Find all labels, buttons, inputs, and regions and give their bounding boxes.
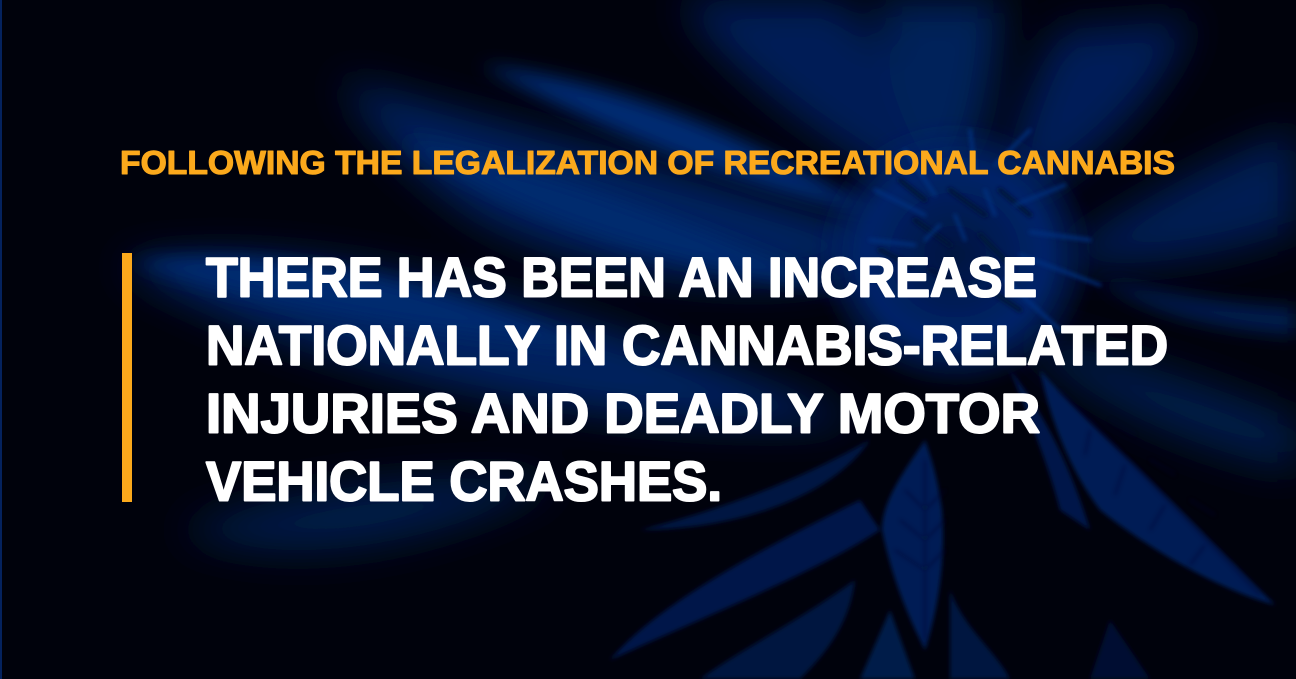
main statement: INJURIES AND DEADLY MOTOR <box>206 382 1040 444</box>
heading: following the legalization: FOLLOWING THE LEGALIZATION OF RECREATIONAL CANNABIS <box>120 144 1175 181</box>
main statement <box>206 246 1168 512</box>
accent bar <box>122 253 132 502</box>
sharp serrated leaves <box>610 370 1275 679</box>
main statement: NATIONALLY IN CANNABIS-RELATED <box>206 314 1168 376</box>
main statement: THERE HAS BEEN AN INCREASE <box>206 246 1037 308</box>
central bud <box>815 120 1095 390</box>
main statement: VEHICLE CRASHES. <box>206 450 722 512</box>
